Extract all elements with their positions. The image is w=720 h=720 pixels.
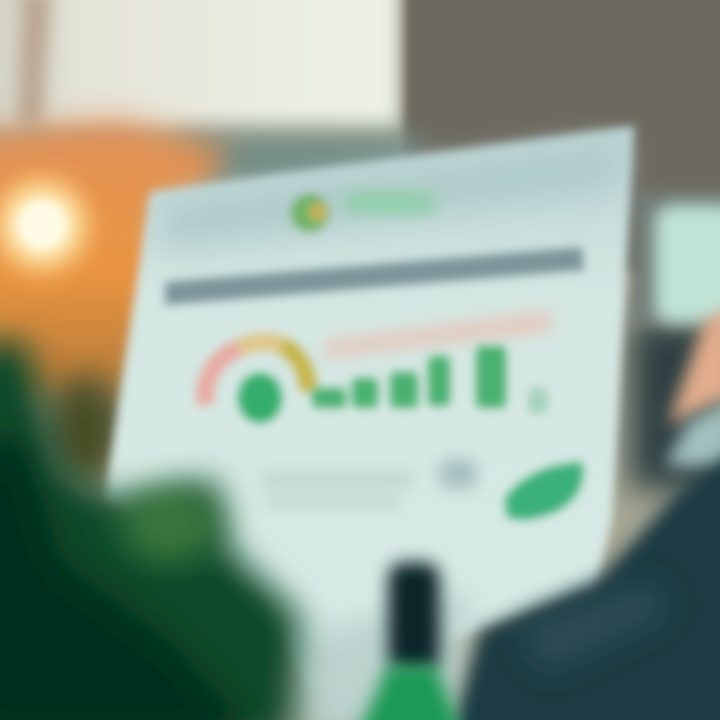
background: brown wall bbox=[404, 0, 720, 270]
right side: orange accent bbox=[668, 305, 720, 425]
chart: green bars bbox=[312, 346, 506, 408]
icon: green leaf badge bbox=[505, 462, 583, 520]
plant: light leaf bbox=[120, 487, 220, 563]
right side: pale sleeve bbox=[665, 400, 720, 470]
foreground: jacket highlight bbox=[520, 585, 670, 670]
panel: blurred infographic card bbox=[105, 126, 634, 690]
right side panel: dark edge bbox=[630, 320, 720, 490]
background left dark plant behind card bbox=[45, 375, 125, 485]
foreground: green bottle base bbox=[355, 665, 465, 720]
foreground: bottle neck bbox=[388, 562, 440, 672]
foreground: pale lower strip bbox=[290, 590, 470, 720]
right side panel: grey mid bbox=[630, 190, 720, 320]
icon: setting sun bbox=[0, 163, 104, 287]
text block: blurred caption lines bbox=[260, 460, 476, 508]
chart: small faded bar bbox=[528, 388, 548, 414]
subtitle strip bbox=[325, 312, 552, 357]
foreground: green plant bbox=[0, 340, 300, 720]
background: teal haze bbox=[180, 135, 420, 195]
tree trunk silhouette bbox=[18, 0, 52, 125]
chart: gauge bbox=[205, 342, 308, 405]
heading: blurred title bbox=[165, 247, 584, 305]
heading: logo wordmark bbox=[345, 192, 435, 214]
plant: dark core bbox=[0, 440, 260, 720]
card header shading bbox=[160, 140, 625, 250]
background: orange sunset glow bbox=[0, 120, 230, 400]
background: sky bbox=[0, 0, 398, 130]
right side panel: mint screen bbox=[655, 205, 720, 323]
chart: gauge needle blob bbox=[238, 373, 282, 423]
icon: logo bbox=[291, 194, 329, 232]
foreground: dark jacket bottom right bbox=[450, 445, 720, 720]
